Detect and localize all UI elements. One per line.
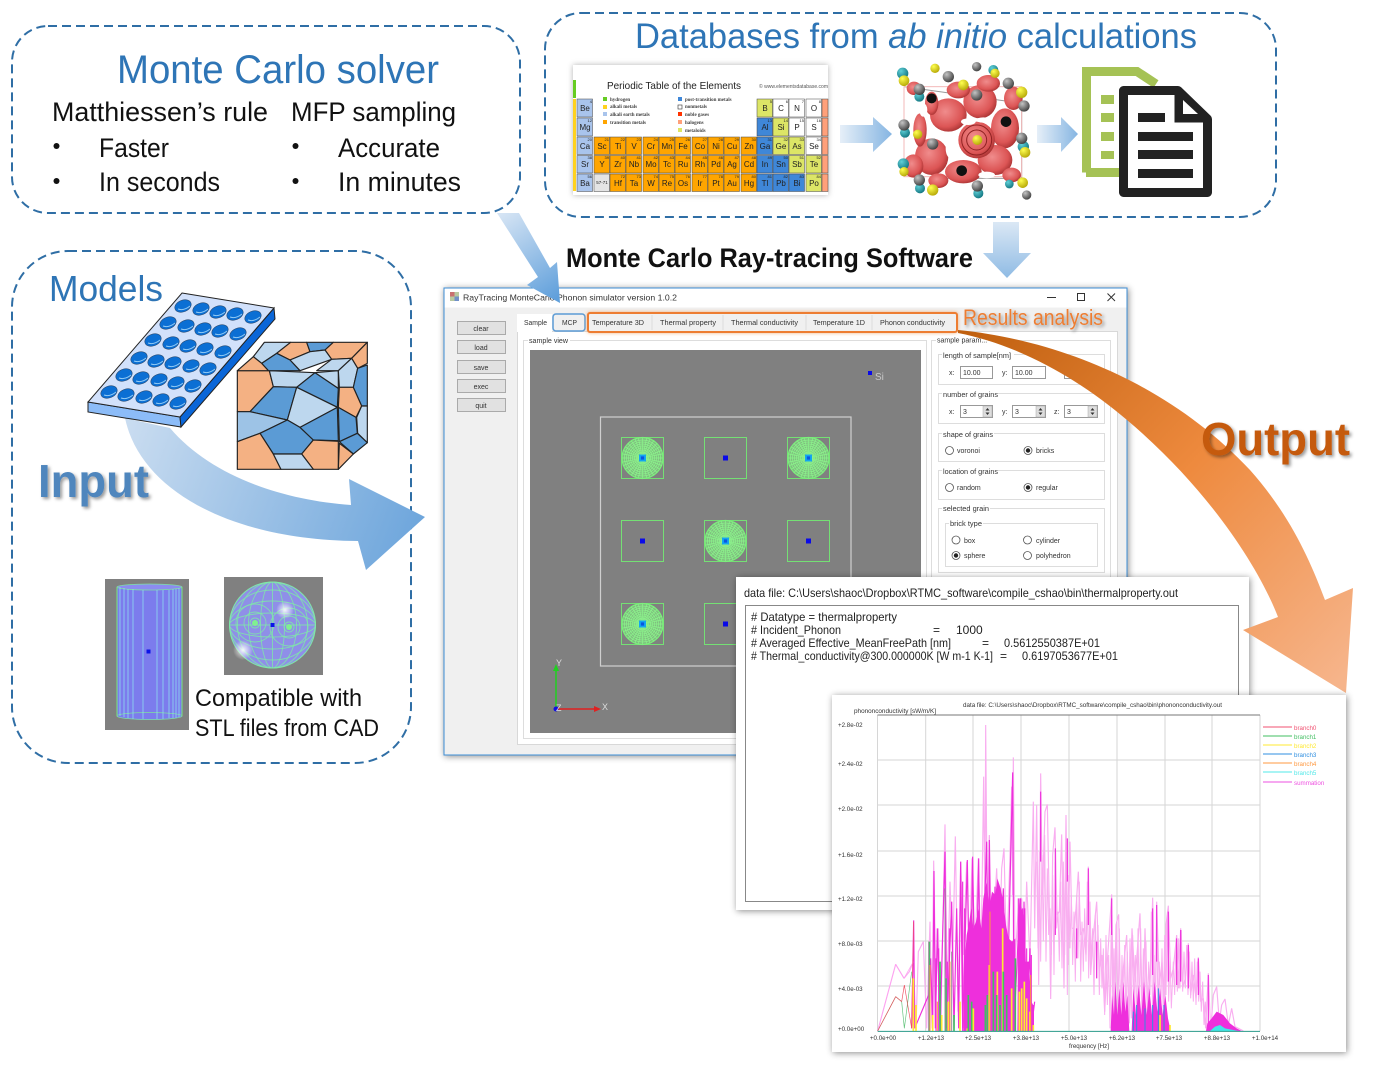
tab body [518,332,1118,744]
column: MFP sampling: MFP sampling [291,97,456,127]
side buttons: clear [473,326,489,333]
periodic table: Ni [712,142,720,151]
sample parameters group: cylinder [1036,538,1061,545]
periodic table: Ge [776,142,787,151]
legend: branch5 [1294,770,1317,777]
periodic table: 15 [800,118,805,123]
sample view group: sample view [529,338,569,345]
output file text: 1000 [956,623,983,637]
periodic table: 14 [784,118,789,123]
label: Input: Input [38,455,149,507]
side buttons: save [474,365,488,372]
y axis labels: +2.8e-02 [838,722,863,729]
periodic table: halogens [685,121,704,126]
periodic table: Rh [695,160,705,169]
side buttons: exec [474,384,489,391]
window title text: RayTracing MonteCarlo Phonon simulator version 1.0.2 [463,292,677,302]
periodic table: Be [580,104,590,113]
periodic table: 84 [817,174,822,179]
y axis labels: +4.0e-03 [838,986,863,993]
periodic table: Sn [776,160,786,169]
periodic table: metaloids [685,129,706,134]
sample parameters group: bricks [1036,448,1055,455]
periodic table: 47 [735,155,740,160]
y axis labels: +8.0e-03 [838,941,863,948]
sample parameters group: y: [1002,370,1008,377]
periodic table: Zn [744,142,754,151]
crystal structure render [897,62,1031,200]
column: Matthiessen's rule: In seconds [99,167,220,197]
periodic table: 38 [588,155,593,160]
periodic table: 28 [719,137,724,142]
periodic table: 78 [719,174,724,179]
x axis labels [870,1035,1279,1050]
sample parameters group: location of grains [943,469,999,476]
tabs: Thermal property [660,320,717,327]
arrow: database to software [983,222,1031,278]
column: Matthiessen's rule [52,97,268,197]
panel: Models [12,251,425,763]
periodic table: W [647,179,655,188]
y axis title: phononconductivity [sW/m/K] [854,708,936,715]
periodic table: N [794,104,800,113]
periodic table: 6 [786,99,789,104]
sample parameters group [932,336,1110,580]
periodic table: 13 [768,118,773,123]
periodic table: 46 [719,155,724,160]
sample view group: Y [556,658,562,668]
x axis labels: +8.8e+13 [1204,1035,1231,1042]
sample view group: Z [556,703,562,713]
periodic table: 81 [768,174,773,179]
periodic table: 22 [621,137,626,142]
periodic table: Pb [776,179,786,188]
periodic table: C [778,104,784,113]
sample parameters group: random [957,485,981,492]
y axis labels: +0.0e+00 [838,1026,865,1033]
periodic table: post-transition metals [685,98,732,103]
tabs: MCP [562,320,577,327]
periodic table: transition metals [610,121,646,126]
arrow: structure to document [1037,117,1078,152]
legend: branch2 [1294,743,1317,750]
output file text: = [933,623,940,637]
periodic table: 26 [686,137,691,142]
window controls [1047,294,1115,301]
tabs [517,313,957,332]
arrow: input [125,418,425,570]
periodic table: V [631,142,637,151]
icon: data documents [1086,72,1208,192]
periodic table: Zr [614,160,622,169]
periodic table: 77 [703,174,708,179]
periodic table: 49 [768,155,773,160]
periodic table: Nb [629,160,640,169]
arrow: periodic table to structure [840,117,892,152]
periodic table: Ag [727,160,737,169]
sample parameters group: selected grain [943,506,989,513]
periodic table: nonmetals [685,105,707,110]
periodic table: Tl [762,179,769,188]
sample parameters group: sphere [964,553,986,560]
tabs: Sample [524,320,547,327]
periodic table: 75 [670,174,675,179]
periodic table: Al [761,123,769,132]
periodic table: Re [662,179,673,188]
periodic table: 74 [654,174,659,179]
output file text [751,610,1118,663]
periodic table: As [792,142,802,151]
output file text: # Thermal_conductivity@300.000000K [W m-1 K-1] [751,649,993,663]
y axis labels: +2.4e-02 [838,761,863,768]
x axis labels: +6.2e+13 [1109,1035,1136,1042]
label: Results analysis: Results analysis [963,305,1103,330]
caption: compatible with STL files: Compatible with [195,685,362,712]
sample parameters group: 10.00 [1015,370,1033,377]
periodic table: 80 [752,174,757,179]
sample parameters group: sample param... [937,338,987,344]
periodic table: Ta [630,179,639,188]
periodic table: Co [695,142,706,151]
caption: compatible with STL files [195,685,379,742]
periodic table: 56 [588,174,593,179]
y axis labels: +1.2e-02 [838,896,863,903]
heading: Monte Carlo solver: Monte Carlo solver [117,48,439,92]
x axis labels: +2.5e+13 [965,1035,992,1042]
periodic table: 12 [588,118,593,123]
legend: branch3 [1294,752,1317,759]
periodic table: 79 [735,174,740,179]
sample parameters group: brick type [950,521,982,528]
periodic table: Te [810,160,819,169]
legend: branch4 [1294,761,1317,768]
output file text: 0.5612550387E+01 [1004,636,1100,650]
periodic table: 27 [703,137,708,142]
tabs: Phonon conductivity [880,320,946,327]
model: perforated plate [88,293,275,427]
periodic table: Periodic Table of the Elements [607,80,741,92]
legend [1263,725,1325,787]
column: MFP sampling: Accurate [338,133,440,163]
sample parameters group: voronoi [957,448,980,455]
periodic table: Fe [678,142,688,151]
thermal property output window [736,577,1249,910]
periodic table: 33 [800,137,805,142]
periodic table: 34 [817,137,822,142]
periodic table: Mn [661,142,673,151]
output file text: # Averaged Effective_MeanFreePath [nm] [751,636,951,650]
periodic table: Au [727,179,737,188]
output file text: # Datatype = thermalproperty [751,610,897,624]
arrow: MC solver to software [497,213,560,303]
sample parameters group: regular [1036,485,1058,492]
side buttons: quit [475,403,487,410]
legend: branch0 [1294,725,1317,732]
sample parameters group: number of grains [943,392,999,399]
periodic table: S [811,123,817,132]
periodic table: 42 [654,155,659,160]
sample parameters group: length of sample[nm] [943,353,1011,360]
periodic table: Hg [744,179,754,188]
panel: Monte Carlo solver [12,26,520,213]
periodic table: In [762,160,768,169]
periodic table: 39 [605,155,610,160]
periodic table: P [794,123,800,132]
sample parameters group: polyhedron [1036,553,1071,560]
sample parameters group: 3 [1067,409,1071,416]
column: Matthiessen's rule: Matthiessen’s rule [52,97,268,127]
sample parameters group: y: [1002,409,1008,416]
chart title: data file: C:\Users\shaoc\Dropbox\RTMC_software\compile_cshao\bin\phononconductivity.out [963,702,1222,709]
periodic table: Y [599,160,605,169]
periodic table: Sc [597,142,607,151]
periodic table: 73 [637,174,642,179]
sample parameters group: 3 [963,409,967,416]
legend: branch1 [1294,734,1317,741]
thermal property output window: data file: C:\Users\shaoc\Dropbox\RTMC_software\compile_cshao\bin\thermalproperty.out [744,586,1179,600]
periodic table: © www.elementsdatabase.com [759,83,828,90]
sample view group: X [602,702,608,712]
periodic table: 29 [735,137,740,142]
tabs: Temperature 1D [813,320,865,327]
periodic table: Cu [727,142,737,151]
periodic table: Ba [580,179,590,188]
periodic table: 82 [784,174,789,179]
model: wireframe cylinder [105,579,189,730]
x axis labels: +1.0e+14 [1252,1035,1279,1042]
periodic table: Si [777,123,785,132]
periodic table: 4 [590,99,593,104]
tabs: Thermal conductivity [731,320,799,327]
periodic table: 5 [770,99,773,104]
heading: Models: Models [49,268,163,309]
periodic table: 25 [670,137,675,142]
x axis labels: +3.8e+13 [1013,1035,1040,1042]
periodic table: 44 [686,155,691,160]
periodic table: 76 [686,174,691,179]
periodic table: 48 [752,155,757,160]
panel: Databases [545,13,1276,217]
periodic table [573,65,828,195]
periodic table: Se [809,142,819,151]
column: Matthiessen's rule: Faster [99,133,169,163]
sample parameters group: shape of grains [943,432,994,439]
periodic table: 21 [605,137,610,142]
app icon [450,292,459,301]
periodic table: 83 [800,174,805,179]
periodic table: 41 [637,155,642,160]
column: MFP sampling: In minutes [338,167,461,197]
sample parameters group: 3 [1015,409,1019,416]
output file text: 0.6197053677E+01 [1022,649,1118,663]
periodic table: 72 [621,174,626,179]
periodic table: Po [809,179,819,188]
periodic table: Ti [615,142,621,151]
side buttons [458,322,506,412]
output file text: = [1000,649,1007,663]
periodic table: Pd [711,160,721,169]
periodic table: alkali earth metals [610,113,650,118]
periodic table: 16 [817,118,822,123]
sample parameters group: z: [1054,409,1060,416]
periodic table: 45 [703,155,708,160]
label: Output: Output [1201,413,1350,465]
periodic table: 20 [588,137,593,142]
periodic table: 31 [768,137,773,142]
sample view group: Si [875,372,884,383]
periodic table: 30 [752,137,757,142]
side buttons: load [474,345,488,352]
sample parameters group: 10.00 [963,370,981,377]
periodic table: Pt [712,179,721,188]
periodic table: Ca [580,142,591,151]
periodic table: Sr [581,160,589,169]
x axis labels: +0.0e+00 [870,1035,897,1042]
periodic table: 52 [817,155,822,160]
periodic table: 7 [802,99,805,104]
line chart: branch spectra [878,725,1260,1031]
periodic table: Cr [647,142,656,151]
periodic table: Mg [579,123,591,132]
periodic table: 43 [670,155,675,160]
sample parameters group: box [964,538,976,545]
periodic table: 51 [800,155,805,160]
model: polycrystal cube [237,342,367,469]
periodic table: 50 [784,155,789,160]
periodic table: Mo [645,160,657,169]
x axis labels: frequency [Hz] [1069,1043,1109,1050]
output file text: # Incident_Phonon [751,623,841,637]
software title: Monte Carlo Ray-tracing Software [566,243,973,273]
phonon conductivity chart window [832,695,1346,1052]
y axis labels: +2.0e-02 [838,806,863,813]
legend: summation [1294,780,1325,787]
periodic table: 40 [621,155,626,160]
output file text: = [982,636,989,650]
periodic table: 8 [819,99,822,104]
arrow: output [958,330,1353,693]
periodic table: 24 [654,137,659,142]
heading: Databases from ab initio calculations: Databases from ab initio calculations [635,17,1197,56]
periodic table: B [762,104,768,113]
periodic table: Tc [663,160,671,169]
periodic table: 57-71 [596,180,608,185]
sample parameters group: x: [949,370,954,377]
x axis labels: +7.5e+13 [1156,1035,1183,1042]
plot grid [878,715,1260,1031]
periodic table: Ru [678,160,688,169]
periodic table: Ga [760,142,771,151]
tabs: Temperature 3D [592,320,644,327]
periodic table: alkali metals [610,105,637,110]
sample parameters group: x: [949,409,954,416]
software window [444,288,1127,755]
periodic table: Os [678,179,688,188]
y axis labels: +1.6e-02 [838,852,863,859]
periodic table: 32 [784,137,789,142]
periodic table: noble gases [685,113,709,118]
sample view group [524,336,926,738]
y axis labels [838,722,865,1033]
model: wireframe sphere [224,577,323,675]
x axis labels: +5.0e+13 [1061,1035,1088,1042]
periodic table: Cd [744,160,754,169]
periodic table: Ir [698,179,703,188]
periodic table: Bi [793,179,801,188]
periodic table: Hf [614,179,623,188]
column: MFP sampling [291,97,461,197]
periodic table: hydrogen [610,98,630,103]
caption: compatible with STL files: STL files from CAD [195,715,379,742]
periodic table: Sb [792,160,802,169]
periodic table: O [811,104,817,113]
periodic table: 23 [637,137,642,142]
x axis labels: +1.2e+13 [918,1035,945,1042]
